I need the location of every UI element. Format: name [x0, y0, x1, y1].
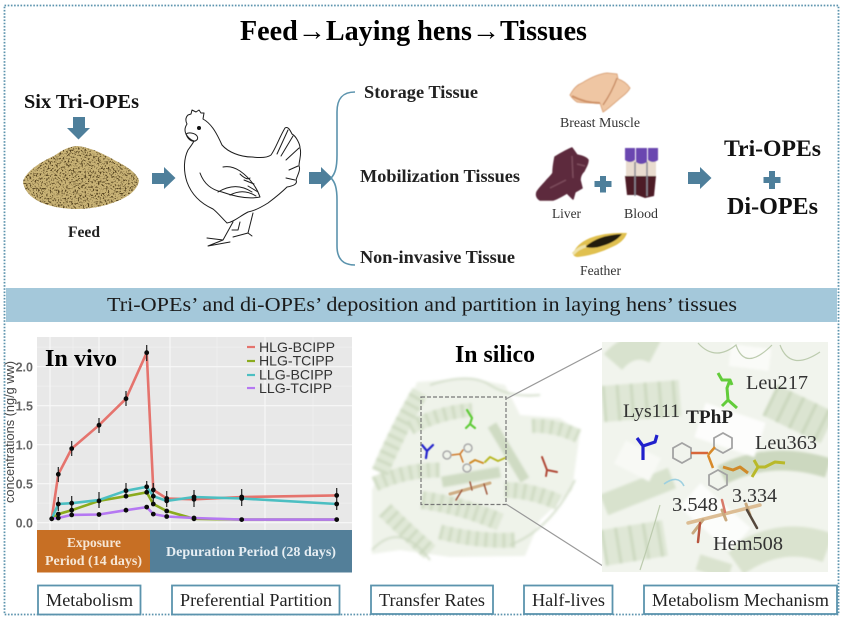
arrow: feed to hen	[152, 167, 176, 189]
label: Six Tri-OPEs: Six Tri-OPEs	[24, 91, 139, 113]
label: distance 3.334: 3.334	[732, 485, 777, 507]
arrow: zoom upper	[506, 344, 612, 399]
label: Leu217: Leu217	[746, 372, 808, 394]
dashed selection box	[421, 397, 506, 504]
label: distance 3.548: 3.548	[672, 494, 718, 516]
icon: hen line drawing	[184, 110, 301, 246]
legend: LLG-TCIPP	[259, 380, 332, 396]
label: Non-invasive Tissue: Non-invasive Tissue	[360, 247, 515, 267]
bar: depuration period: Depuration Period (28 days)	[166, 545, 336, 560]
protein residues overview	[422, 410, 557, 500]
box: Transfer Rates	[371, 586, 493, 614]
icon: plus large	[764, 171, 780, 189]
bar: exposure period: Exposure	[67, 536, 121, 551]
label: Hem508: Hem508	[713, 533, 783, 555]
arrow: zoom lower	[506, 504, 612, 572]
title: Feed→Laying hens→Tissues	[240, 16, 587, 47]
y axis tick labels: 0.5	[16, 478, 33, 492]
box: Preferential Partition	[172, 586, 340, 614]
icon: plus small	[594, 176, 612, 192]
banner: deposition and partition	[6, 288, 837, 322]
bar: depuration period	[150, 530, 352, 572]
box: Metabolism	[38, 586, 140, 614]
y axis tick labels: 1.0	[16, 438, 33, 452]
series: LLG-TCIPP	[52, 507, 337, 520]
protein structure overview	[372, 378, 580, 560]
legend: HLG-BCIPP	[259, 339, 335, 355]
panel: in vivo line chart	[3, 337, 352, 530]
panel: binding site zoom	[602, 342, 828, 572]
residue: Hem508 sticks	[688, 500, 760, 542]
legend: LLG-BCIPP	[259, 366, 333, 382]
icon: feather	[573, 233, 627, 257]
label: Mobilization Tissues: Mobilization Tissues	[360, 166, 520, 186]
label: Storage Tissue: Storage Tissue	[364, 82, 478, 102]
box: Metabolism: Metabolism	[46, 590, 133, 610]
ligand: TPhP	[673, 433, 732, 490]
residue: Leu217 sticks	[718, 373, 737, 408]
label: TPhP: TPhP	[686, 407, 733, 428]
y axis tick labels: 1.5	[16, 400, 33, 414]
data points	[52, 353, 337, 520]
banner: deposition and partition: Tri-OPEs’ and di-OPEs’ deposition and partition in laying hens’ tissues	[107, 294, 737, 316]
label: Leu363: Leu363	[755, 432, 817, 454]
label: Lys111: Lys111	[623, 401, 680, 422]
arrow: tissues to OPEs	[688, 167, 712, 189]
heading: In silico: In silico	[455, 342, 535, 368]
box: Half-lives: Half-lives	[532, 590, 605, 610]
label: Breast Muscle: Breast Muscle	[560, 116, 640, 131]
y axis tick labels: 2.0	[16, 360, 33, 374]
icon: breast muscle	[570, 73, 630, 112]
y axis tick labels	[16, 360, 33, 530]
box: Preferential Partition: Preferential Partition	[180, 590, 332, 610]
bar: exposure period: Period (14 days)	[45, 553, 142, 569]
series: HLG-BCIPP	[52, 353, 337, 519]
label: Blood: Blood	[624, 207, 658, 222]
box: Metabolism Mechanism: Metabolism Mechanism	[652, 590, 829, 610]
icon: feed pile	[23, 146, 139, 209]
y axis tick labels: 0.0	[16, 516, 33, 530]
error bars	[58, 345, 337, 511]
label: Tri-OPEs: Tri-OPEs	[724, 136, 821, 162]
arrow: hen to tissues	[309, 167, 332, 189]
series: LLG-BCIPP	[52, 487, 337, 519]
label: Di-OPEs: Di-OPEs	[727, 194, 818, 220]
label: Feed: Feed	[68, 224, 100, 241]
box: Metabolism Mechanism	[644, 586, 837, 614]
icon: blood tubes	[625, 148, 658, 198]
icon: liver	[537, 148, 588, 200]
label: Liver: Liver	[552, 206, 581, 221]
legend: HLG-TCIPP	[259, 352, 334, 368]
arrow: into feed	[67, 117, 90, 140]
y axis title: concentrations (ng/g ww)	[3, 361, 17, 503]
box: Transfer Rates: Transfer Rates	[379, 590, 485, 610]
label: Feather: Feather	[580, 263, 621, 278]
series: HLG-TCIPP	[52, 492, 337, 520]
residue: Leu363 sticks	[723, 460, 785, 477]
bar: exposure period	[37, 530, 150, 572]
brace	[331, 92, 355, 265]
chart heading: In vivo: In vivo	[45, 345, 117, 372]
box: Half-lives	[524, 586, 612, 614]
legend	[247, 339, 335, 396]
residue: Lys111 sticks	[637, 435, 657, 460]
